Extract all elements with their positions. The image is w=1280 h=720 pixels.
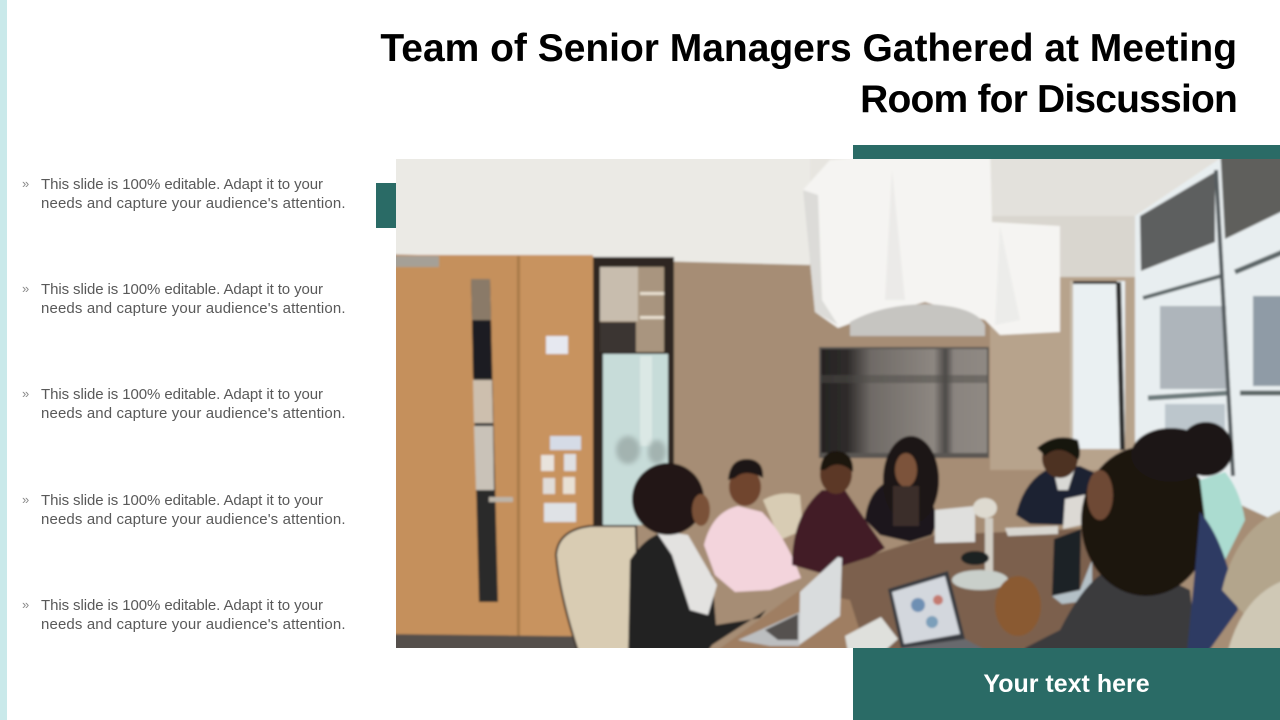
paper on table [845, 617, 898, 663]
bullet 3: » [22, 386, 29, 401]
bullet 5: » [22, 597, 29, 612]
bullet 3: This slide is 100% editable. Adapt it to your [41, 386, 323, 403]
back chair [763, 493, 803, 540]
bullet 4 [22, 492, 346, 528]
small teal accent block [376, 183, 396, 228]
bullet 3 [22, 386, 346, 422]
bullet 1: » [22, 176, 29, 191]
person: maroon top [792, 451, 885, 573]
ceiling and walls [380, 145, 1280, 663]
title [380, 27, 1237, 121]
table items [935, 494, 1092, 604]
bullet 1 [22, 176, 346, 212]
left chair [556, 526, 640, 663]
bullet 5: needs and capture your audience's attention. [41, 616, 346, 633]
wood door and panel [380, 255, 640, 663]
laptop with chart screen [888, 571, 1010, 663]
title: Team of Senior Managers Gathered at Meeting [380, 27, 1237, 70]
windows and blinds [1070, 145, 1280, 530]
photo: meeting room [396, 159, 1280, 648]
silver laptop [738, 557, 842, 646]
caption box: Your text here [983, 670, 1150, 698]
bullet 4: needs and capture your audience's attention. [41, 511, 346, 528]
person: pink blouse [704, 459, 801, 592]
bullet 5 [22, 597, 346, 633]
person: woman in navy jacket [1016, 437, 1102, 525]
bullet 3: needs and capture your audience's attention. [41, 405, 346, 422]
bullet 2: This slide is 100% editable. Adapt it to your [41, 281, 323, 298]
TV screen [819, 347, 989, 458]
right chairs [1222, 506, 1280, 663]
glass door [593, 257, 674, 525]
table [700, 528, 1120, 663]
caption box [853, 648, 1280, 720]
left accent stripe [0, 0, 7, 720]
bullet 4: This slide is 100% editable. Adapt it to your [41, 492, 323, 509]
bullet 1: needs and capture your audience's attention. [41, 195, 346, 212]
bullet 2 [22, 281, 346, 317]
title: Room for Discussion [860, 78, 1237, 121]
bullet 1: This slide is 100% editable. Adapt it to your [41, 176, 323, 193]
top teal accent bar [853, 145, 1280, 159]
bullet 4: » [22, 492, 29, 507]
ceiling fabric sculpture [803, 145, 1060, 336]
bullet 2: needs and capture your audience's attention. [41, 300, 346, 317]
bullet list [22, 176, 346, 633]
bullet 2: » [22, 281, 29, 296]
bullet 5: This slide is 100% editable. Adapt it to your [41, 597, 323, 614]
person: woman in black, long hair [865, 436, 939, 542]
person: curly hair woman [628, 463, 766, 663]
person: back right women [1131, 422, 1245, 663]
person: foreground woman with curly hair [995, 446, 1211, 663]
